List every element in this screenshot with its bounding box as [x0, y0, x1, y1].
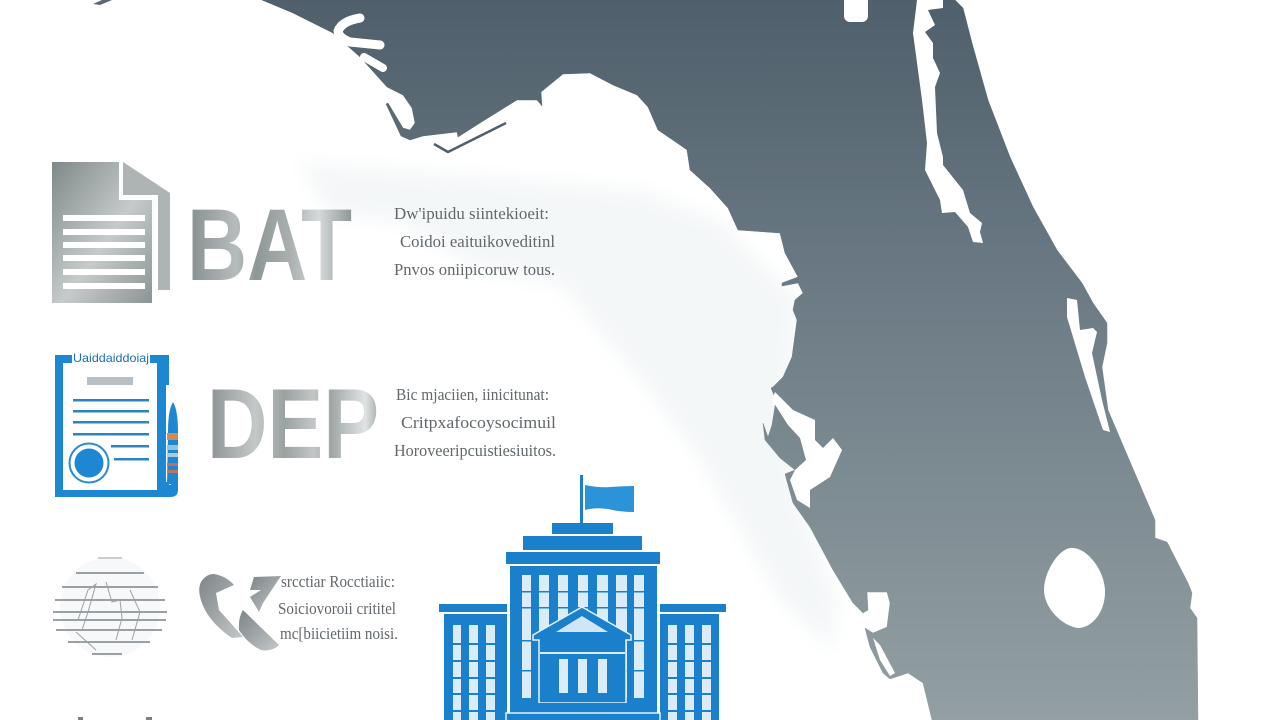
text block: contact description: srcctiar Rocctiaiic:: [281, 572, 395, 591]
heading: BAT: BAT: [187, 188, 352, 302]
heading: DEP: DEP: [207, 368, 379, 479]
Tampa Bay peninsula: [772, 392, 842, 508]
text block: contact description: Soiciovoroii crititel: [278, 599, 396, 618]
icon: document: [52, 162, 170, 303]
icon: capitol building with flag: [439, 475, 726, 720]
icon: clipboard with seal and pen: [55, 350, 180, 497]
eastern lagoon: [1067, 298, 1110, 432]
text block: BAT description: Dw'ipuidu siintekioeit:: [394, 204, 549, 223]
offshore barrier line: [434, 123, 506, 152]
east coast barrier strip: [913, 0, 983, 243]
Lake Okeechobee: [1044, 548, 1105, 628]
window mullions: [445, 591, 719, 712]
row: DEP: [55, 350, 556, 497]
icon: striped globe: [53, 557, 167, 657]
text block: contact description: mc[biicietiim noisi.: [280, 624, 398, 643]
icon: clipboard with seal and pen: Uaiddaiddoiaj: [73, 351, 149, 365]
row: contact: [53, 557, 398, 657]
icon: telephone handset: [199, 574, 281, 650]
text block: DEP description: Critpxafocoysocimuil: [401, 413, 556, 432]
row: BAT: [52, 162, 555, 303]
text block: contact description: [278, 572, 398, 643]
text block: BAT description: Coidoi eaituikoveditinl: [400, 232, 555, 251]
tall windows: [453, 575, 711, 720]
text block: DEP description: Bic mjaciien, iinicitunat:: [396, 385, 549, 404]
text block: DEP description: Horoveeripcuistiesiuitos.: [394, 441, 556, 460]
text block: BAT description: [394, 204, 555, 279]
text block: DEP description: [394, 385, 556, 460]
southwest inlet sliver: [873, 638, 895, 676]
top-left barrier fragment: [93, 0, 112, 5]
central portico: [533, 607, 631, 703]
flag: [580, 475, 634, 523]
panhandle coastal islands: [338, 18, 383, 68]
bottom edge cropped icon: [78, 717, 152, 720]
faint ghost map background: [298, 162, 838, 650]
text block: BAT description: Pnvos oniipicoruw tous.: [394, 260, 555, 279]
northern lake: [844, 0, 868, 22]
